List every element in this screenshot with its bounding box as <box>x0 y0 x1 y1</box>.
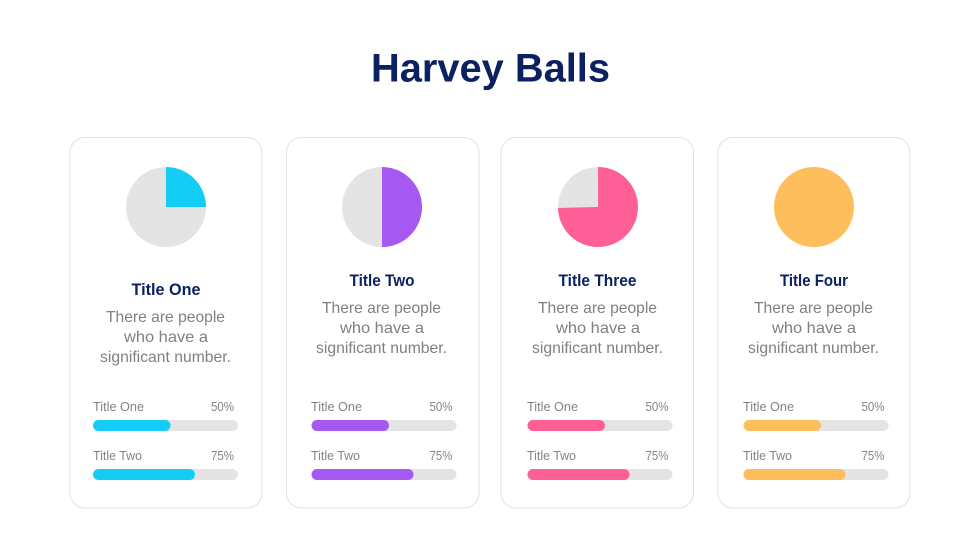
text block: description <box>532 300 663 357</box>
text block: description: who have a <box>555 320 640 337</box>
progress bar: title one 50% <box>527 399 672 431</box>
progress bar: title two 75%: 75% <box>430 448 453 463</box>
text block: description: There are people <box>538 300 657 317</box>
progress bar: title two 75%: 75% <box>862 448 885 463</box>
text block: description: who have a <box>339 320 424 337</box>
text block: description <box>100 309 231 366</box>
heading: title one: Title One <box>132 280 200 299</box>
text block: description: There are people <box>106 309 225 326</box>
text block: description: significant number. <box>100 349 231 366</box>
progress bar: title one 50% <box>743 399 888 431</box>
progress bar: title two 75%: Title Two <box>93 448 142 463</box>
panel: card one <box>70 138 262 508</box>
panel: card three <box>501 138 694 508</box>
progress bar: title one 50%: Title One <box>93 399 144 414</box>
text block: description: significant number. <box>316 340 447 357</box>
text block: description: significant number. <box>532 340 663 357</box>
progress bar: title two 75%: Title Two <box>527 448 576 463</box>
text block: description: significant number. <box>748 340 879 357</box>
icon: three-quarter harvey ball <box>558 167 638 247</box>
text block: description: who have a <box>123 329 208 346</box>
progress bar: title one 50% <box>311 399 456 431</box>
heading: title two: Title Two <box>350 271 414 290</box>
progress bar: title one 50%: 50% <box>862 399 885 414</box>
progress bar: title one 50%: 50% <box>211 399 234 414</box>
panel: card four <box>718 138 910 508</box>
progress bar: title two 75% <box>527 448 672 480</box>
progress bar: title one 50%: 50% <box>646 399 669 414</box>
progress bar: title one 50%: 50% <box>430 399 453 414</box>
heading: title three: Title Three <box>558 271 636 290</box>
progress bar: title one 50% <box>93 399 238 431</box>
progress bar: title one 50%: Title One <box>527 399 578 414</box>
text block: description: There are people <box>322 300 441 317</box>
title: Harvey Balls <box>371 46 610 90</box>
text block: description <box>748 300 879 357</box>
progress bar: title two 75% <box>743 448 888 480</box>
icon: full harvey ball <box>774 167 854 247</box>
panel: card two <box>286 138 479 508</box>
progress bar: title two 75%: Title Two <box>743 448 792 463</box>
text block: description: There are people <box>754 300 873 317</box>
text block: description <box>316 300 447 357</box>
progress bar: title two 75% <box>311 448 456 480</box>
progress bar: title two 75%: 75% <box>646 448 669 463</box>
progress bar: title two 75% <box>93 448 238 480</box>
text block: description: who have a <box>771 320 856 337</box>
icon: half harvey ball <box>342 167 422 247</box>
heading: title four: Title Four <box>780 271 848 290</box>
progress bar: title one 50%: Title One <box>311 399 362 414</box>
progress bar: title two 75%: Title Two <box>311 448 360 463</box>
icon: quarter harvey ball <box>126 167 206 247</box>
progress bar: title one 50%: Title One <box>743 399 794 414</box>
progress bar: title two 75%: 75% <box>211 448 234 463</box>
